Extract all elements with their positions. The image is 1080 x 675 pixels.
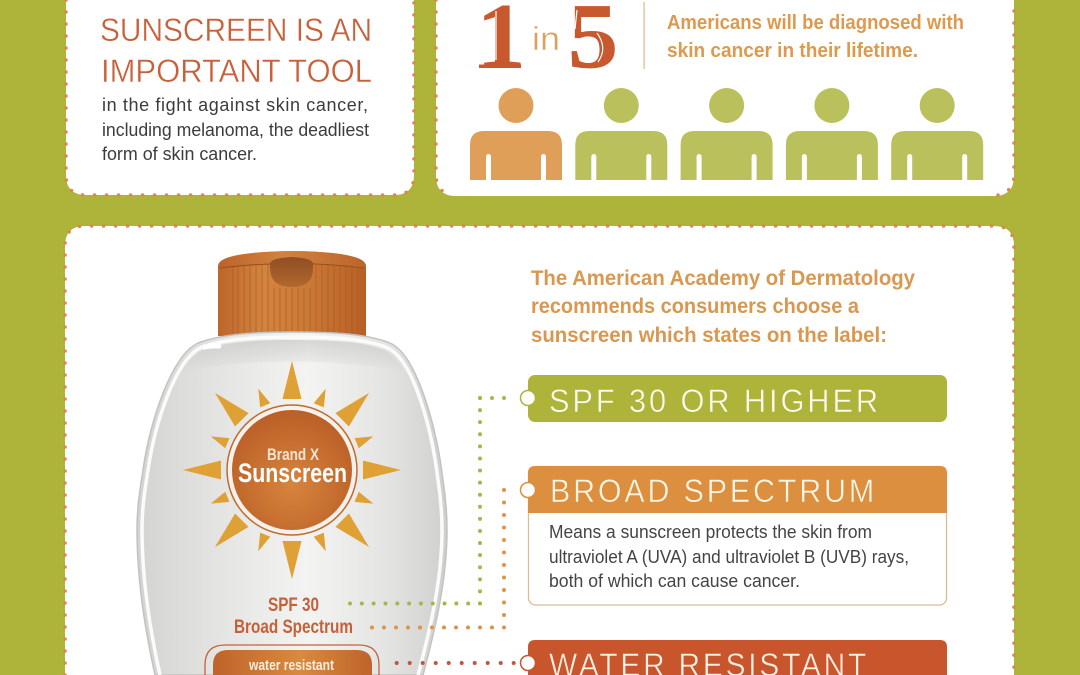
text: academy recommendation: sunscreen which states on the label:	[531, 323, 887, 347]
brand name: Sunscreen	[238, 458, 347, 488]
connector: spf 30 dotted line	[350, 398, 516, 604]
text: americans diagnosed: Americans will be diagnosed with	[667, 12, 964, 34]
text: broad spectrum description: ultraviolet A (UVA) and ultraviolet B (UVB) rays,	[549, 547, 909, 567]
illustration: sunscreen bottle	[137, 251, 447, 675]
bottle body	[137, 332, 447, 675]
text: broad spectrum description	[549, 522, 909, 591]
bottle label: spf 30 broad spectrum: Broad Spectrum	[234, 617, 353, 638]
text: broad spectrum description: both of which can cause cancer.	[549, 571, 800, 591]
callout: water resistant	[520, 640, 947, 675]
bottle label: water resistant pill: water resistant	[248, 658, 334, 674]
bottle label: spf 30 broad spectrum	[234, 595, 353, 638]
statistic: 1 in 5: in	[532, 20, 560, 57]
bottle cap	[218, 251, 366, 336]
callout: broad spectrum	[520, 466, 947, 605]
text: broad spectrum description: Means a sunscreen protects the skin from	[549, 522, 872, 542]
icon: person highlighted	[470, 88, 562, 180]
connector: broad spectrum dotted line	[372, 490, 515, 628]
callout: broad spectrum: BROAD SPECTRUM	[550, 473, 877, 509]
panel: sunscreen is an important tool	[66, 0, 414, 195]
brand name	[238, 445, 347, 488]
brand name: Brand X	[267, 445, 320, 464]
bottle label: spf 30 broad spectrum: SPF 30	[268, 595, 319, 616]
text: americans diagnosed: skin cancer in their lifetime.	[667, 40, 918, 62]
bottle highlight	[142, 337, 442, 675]
divider	[644, 2, 645, 69]
sun rays	[183, 361, 401, 579]
icon: person 2	[575, 88, 667, 180]
text: academy recommendation: The American Academy of Dermatology	[531, 266, 915, 290]
icon: person 4	[786, 88, 878, 180]
bottle top shading	[182, 340, 405, 372]
panel: 1 in 5 statistic	[436, 0, 1014, 196]
callout: spf 30 or higher	[520, 375, 947, 422]
bottle shine	[203, 343, 222, 350]
connector: water resistant dotted line	[397, 661, 514, 665]
panel: sunscreen label recommendations	[65, 226, 1014, 675]
text: skin cancer description: in the fight against skin cancer,	[102, 95, 368, 115]
icon: person 3	[681, 88, 773, 180]
icon: person 5	[891, 88, 983, 180]
heading: sunscreen is an important tool: IMPORTANT TOOL	[101, 53, 372, 89]
heading: sunscreen is an important tool: SUNSCREEN IS AN	[100, 12, 372, 48]
sun disc	[227, 405, 357, 535]
text: americans diagnosed	[667, 12, 964, 62]
text: skin cancer description: form of skin cancer.	[102, 144, 257, 164]
statistic: 1 in 5	[477, 0, 618, 87]
heading: sunscreen is an important tool	[100, 12, 372, 89]
bottle label: water resistant pill	[205, 645, 379, 675]
text: academy recommendation	[531, 266, 915, 347]
text: academy recommendation: recommends consumers choose a	[531, 294, 860, 318]
callout: spf 30 or higher: SPF 30 OR HIGHER	[549, 383, 881, 419]
text: skin cancer description: including melanoma, the deadliest	[102, 120, 369, 140]
text: skin cancer description	[102, 95, 369, 164]
